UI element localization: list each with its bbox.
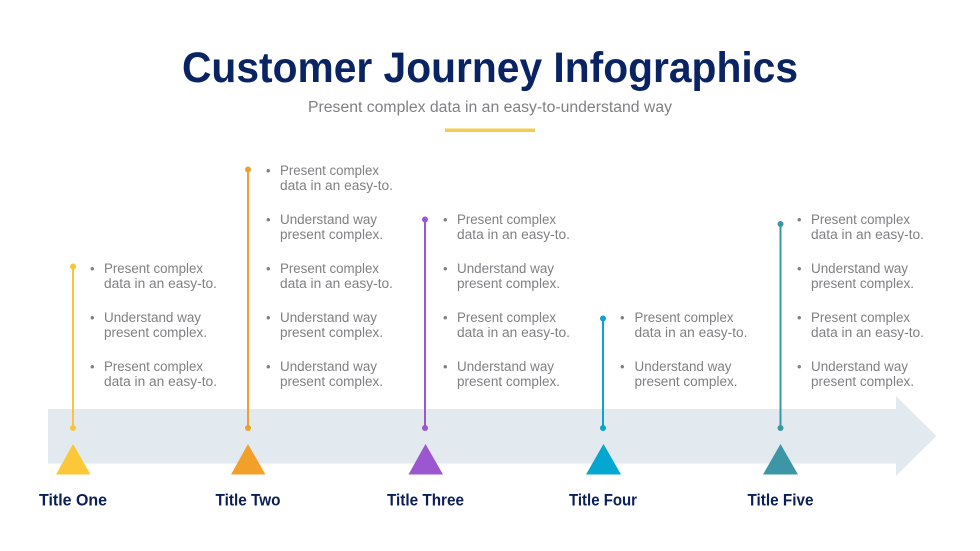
bullet list three: present complex. bbox=[457, 374, 560, 389]
heading two: Title Two bbox=[216, 492, 280, 510]
bullet list five: Understand way bbox=[811, 261, 908, 276]
bullet list five: present complex. bbox=[811, 374, 914, 389]
heading four: Title Four bbox=[569, 492, 638, 510]
bullet list five: • bbox=[797, 261, 802, 276]
connector line one bbox=[70, 264, 76, 431]
bullet list four bbox=[620, 310, 748, 389]
connector line two bbox=[245, 166, 251, 431]
bullet list five: Understand way bbox=[811, 359, 908, 374]
bullet list two: • bbox=[266, 310, 271, 325]
bullet list five: data in an easy-to. bbox=[811, 227, 924, 242]
bullet list five: Present complex bbox=[811, 310, 910, 325]
bullet list three: data in an easy-to. bbox=[457, 325, 570, 340]
bullet list one: data in an easy-to. bbox=[104, 276, 217, 291]
heading three: Title Three bbox=[387, 492, 464, 510]
bullet list two: Understand way bbox=[280, 212, 377, 227]
triangle icon five bbox=[763, 444, 798, 474]
bullet list two: • bbox=[266, 359, 271, 374]
bullet list one: • bbox=[90, 261, 95, 276]
milestone three bbox=[387, 212, 570, 510]
bullet list three: • bbox=[443, 359, 448, 374]
bullet list one bbox=[90, 261, 217, 389]
bullet list two: present complex. bbox=[280, 325, 383, 340]
bullet list three: data in an easy-to. bbox=[457, 227, 570, 242]
triangle icon one bbox=[56, 444, 90, 474]
milestone five bbox=[748, 212, 924, 510]
bullet list five: • bbox=[797, 212, 802, 227]
bullet list three: • bbox=[443, 261, 448, 276]
bullet list three: Present complex bbox=[457, 212, 556, 227]
bullet list one: • bbox=[90, 359, 95, 374]
bullet list three: • bbox=[443, 212, 448, 227]
bullet list five: present complex. bbox=[811, 276, 914, 291]
bullet list two: Understand way bbox=[280, 310, 377, 325]
bullet list one: Present complex bbox=[104, 359, 203, 374]
heading one: Title One bbox=[39, 492, 107, 510]
subtitle: Present complex data in an easy-to-understand way bbox=[308, 99, 672, 116]
bullet list one: Present complex bbox=[104, 261, 203, 276]
bullet list one: • bbox=[90, 310, 95, 325]
milestone one bbox=[39, 261, 217, 510]
bullet list three: • bbox=[443, 310, 448, 325]
connector line three bbox=[422, 216, 428, 431]
bullet list three: Present complex bbox=[457, 310, 556, 325]
bullet list three: Understand way bbox=[457, 261, 554, 276]
bullet list five: • bbox=[797, 359, 802, 374]
heading five: Title Five bbox=[748, 492, 814, 510]
timeline arrow bbox=[48, 396, 936, 476]
bullet list four: • bbox=[620, 359, 625, 374]
triangle icon three bbox=[408, 444, 443, 474]
bullet list three bbox=[443, 212, 570, 389]
bullet list three: Understand way bbox=[457, 359, 554, 374]
bullet list two: present complex. bbox=[280, 227, 383, 242]
bullet list two: • bbox=[266, 163, 271, 178]
bullet list four: Understand way bbox=[634, 359, 732, 374]
accent bar bbox=[445, 128, 535, 132]
bullet list two: data in an easy-to. bbox=[280, 276, 393, 291]
bullet list one: present complex. bbox=[104, 325, 207, 340]
bullet list two: present complex. bbox=[280, 374, 383, 389]
bullet list one: Understand way bbox=[104, 310, 201, 325]
bullet list five: • bbox=[797, 310, 802, 325]
bullet list two: • bbox=[266, 212, 271, 227]
bullet list two: • bbox=[266, 261, 271, 276]
milestone four bbox=[569, 310, 748, 510]
bullet list three: present complex. bbox=[457, 276, 560, 291]
triangle icon four bbox=[586, 444, 621, 474]
bullet list four: present complex. bbox=[634, 374, 738, 389]
bullet list two: data in an easy-to. bbox=[280, 178, 393, 193]
bullet list four: data in an easy-to. bbox=[634, 325, 748, 340]
bullet list two: Understand way bbox=[280, 359, 377, 374]
bullet list five: Present complex bbox=[811, 212, 910, 227]
bullet list five bbox=[797, 212, 924, 389]
bullet list five: data in an easy-to. bbox=[811, 325, 924, 340]
bullet list two: Present complex bbox=[280, 261, 379, 276]
connector line four bbox=[600, 316, 606, 431]
milestone two bbox=[216, 163, 393, 510]
bullet list four: • bbox=[620, 310, 625, 325]
bullet list four: Present complex bbox=[634, 310, 734, 325]
connector line five bbox=[778, 221, 784, 431]
title: Customer Journey Infographics bbox=[182, 45, 798, 92]
triangle icon two bbox=[231, 444, 266, 474]
bullet list two: Present complex bbox=[280, 163, 379, 178]
bullet list two bbox=[266, 163, 393, 389]
bullet list one: data in an easy-to. bbox=[104, 374, 217, 389]
